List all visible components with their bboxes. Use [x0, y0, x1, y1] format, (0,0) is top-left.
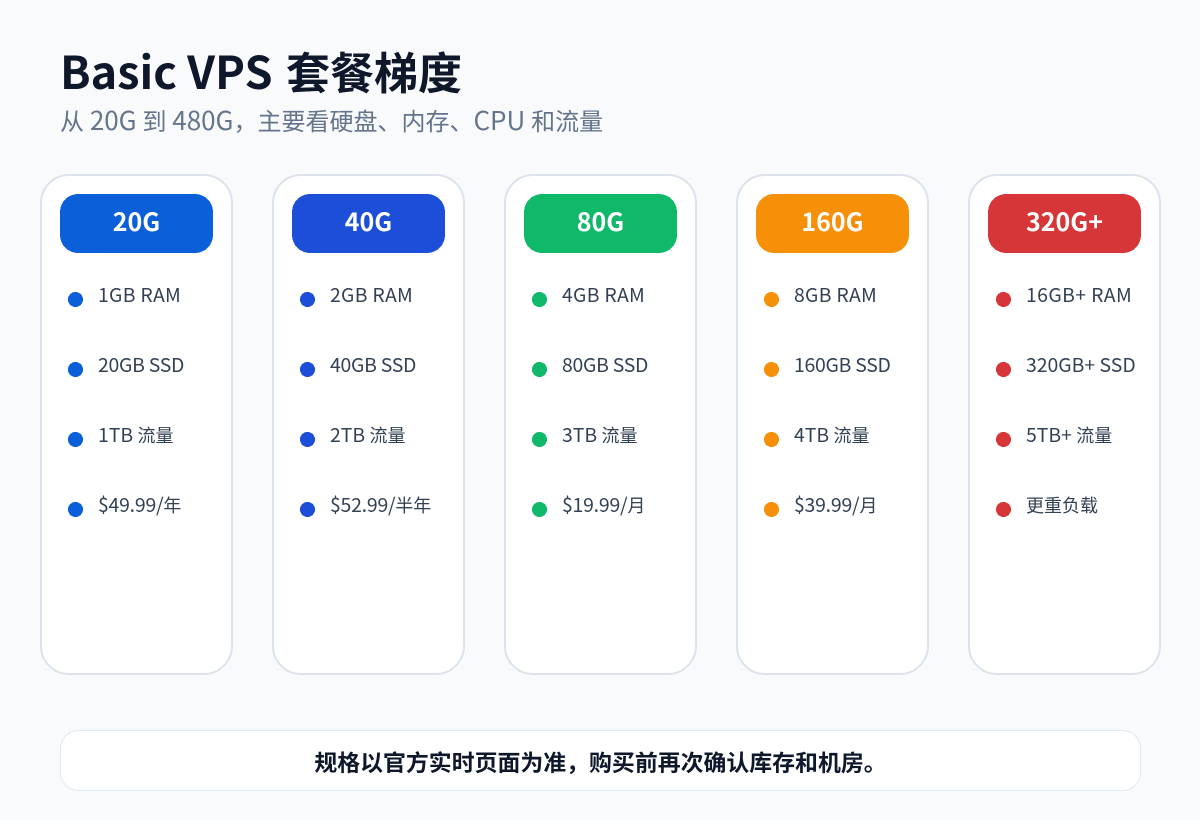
panel: 160G plan: [737, 175, 928, 674]
spec: 8GB RAM: 8GB RAM: [794, 279, 877, 308]
panel: 320G+ plan: [969, 175, 1160, 674]
spec: price: $19.99/月: [562, 489, 645, 518]
header: 40G: 40G: [345, 203, 392, 239]
header: 40G: [292, 194, 445, 253]
spec: 4TB traffic: 4TB 流量: [794, 419, 869, 448]
spec: 1TB traffic: 1TB 流量: [98, 419, 173, 448]
spec: price: $49.99/年: [98, 489, 181, 518]
header: 80G: [524, 194, 677, 253]
title: Basic VPS: [60, 37, 273, 102]
spec: 2GB RAM: 2GB RAM: [330, 279, 413, 308]
spec: 1GB RAM: 1GB RAM: [98, 279, 181, 308]
panel: 80G plan: [505, 175, 696, 674]
spec: 2TB traffic: 2TB 流量: [330, 419, 405, 448]
header: 320G+: 320G+: [1026, 203, 1103, 239]
spec: price: $52.99/半年: [330, 489, 431, 518]
spec: 3TB traffic: 3TB 流量: [562, 419, 637, 448]
header: 160G: [756, 194, 909, 253]
spec: 4GB RAM: 4GB RAM: [562, 279, 645, 308]
panel: 40G plan: [273, 175, 464, 674]
header: 160G: 160G: [801, 203, 864, 239]
spec: 20GB SSD: 20GB SSD: [98, 349, 184, 378]
header: 20G: [60, 194, 213, 253]
spec: 5TB+ traffic: 5TB+ 流量: [1026, 419, 1112, 448]
footer note: [60, 730, 1140, 790]
subtitle: 从 20G 到 480G，主要看硬盘、内存、CPU 和流量: [60, 101, 603, 138]
header: 20G: 20G: [113, 203, 160, 239]
spec: heavier workloads: 更重负载: [1026, 492, 1098, 518]
spec: 40GB SSD: 40GB SSD: [330, 349, 416, 378]
header: 80G: 80G: [577, 203, 624, 239]
title: 套餐梯度: [286, 38, 462, 102]
footer note: 规格以官方实时页面为准，购买前再次确认库存和机房。: [314, 744, 887, 778]
spec: 160GB SSD: 160GB SSD: [794, 349, 891, 378]
spec: 80GB SSD: 80GB SSD: [562, 349, 648, 378]
panel: 20G plan: [41, 175, 232, 674]
spec: 16GB+ RAM: 16GB+ RAM: [1026, 279, 1132, 308]
spec: price: $39.99/月: [794, 489, 877, 518]
spec: 320GB+ SSD: 320GB+ SSD: [1026, 349, 1136, 378]
header: 320G+: [988, 194, 1141, 253]
